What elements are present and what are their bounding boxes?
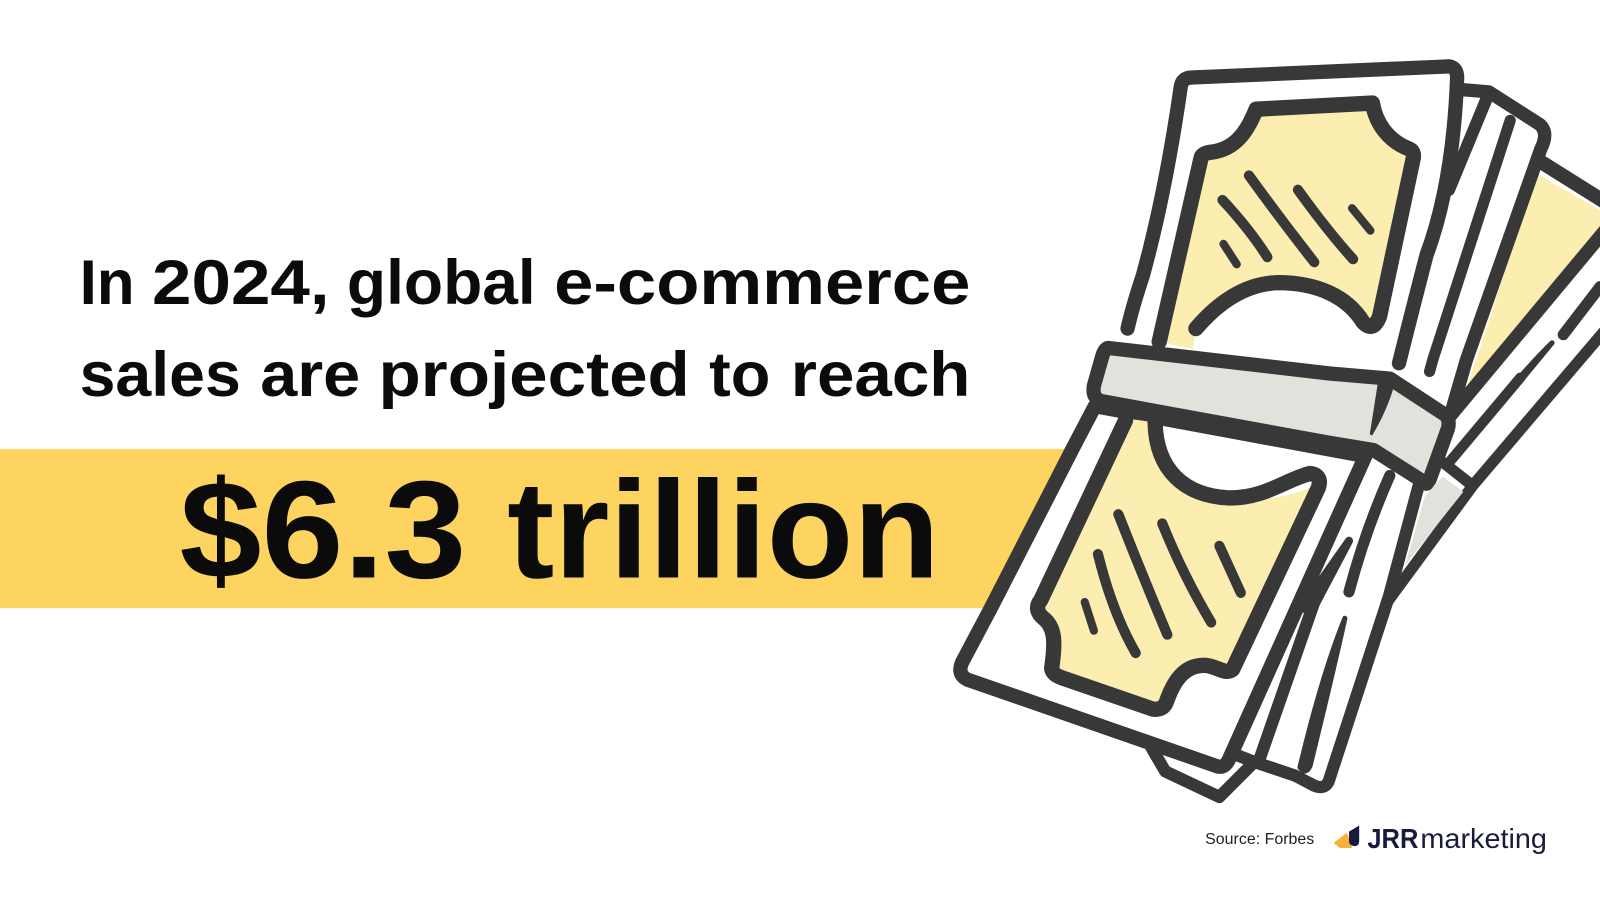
heading: intro text: e-commerce bbox=[554, 248, 970, 318]
paper band bbox=[1094, 348, 1449, 484]
bottom bill hatch marks bbox=[1085, 514, 1241, 653]
heading: intro text: to bbox=[709, 340, 770, 410]
top bill yellow panel bbox=[1159, 103, 1411, 349]
logo: JRR marketing bbox=[1334, 823, 1547, 854]
heading: intro text: In bbox=[80, 248, 135, 318]
bottom bill yellow panel bbox=[1037, 418, 1316, 706]
logo wordmark: JRR bbox=[1367, 823, 1418, 854]
heading: intro text: projected bbox=[379, 340, 690, 410]
lower right bills bbox=[1237, 459, 1418, 787]
middle bills, upper edges bbox=[1430, 90, 1545, 416]
heading: intro text: global bbox=[347, 248, 536, 318]
top bill hatch marks bbox=[1222, 176, 1370, 264]
top bill bbox=[1128, 66, 1457, 363]
highlight band bbox=[0, 449, 1082, 608]
logo wordmark: marketing bbox=[1420, 823, 1547, 854]
logo mark bbox=[1334, 826, 1359, 848]
lower back sheet bbox=[1151, 747, 1255, 797]
heading: intro text bbox=[80, 248, 970, 410]
heading: intro text: 2024, bbox=[152, 248, 330, 318]
icon: stack of banknotes bbox=[960, 66, 1600, 797]
key figure: $6.3 trillion: $6.3 bbox=[180, 453, 466, 608]
key figure: $6.3 trillion: trillion bbox=[507, 453, 940, 608]
back bill, upper right bbox=[1389, 161, 1600, 600]
source note: Source: Forbes bbox=[1205, 831, 1315, 848]
heading: intro text: reach bbox=[791, 340, 970, 410]
heading: intro text: sales bbox=[80, 340, 241, 410]
heading: intro text: are bbox=[260, 340, 360, 410]
key figure: $6.3 trillion bbox=[180, 453, 940, 608]
bottom bill bbox=[960, 406, 1365, 767]
